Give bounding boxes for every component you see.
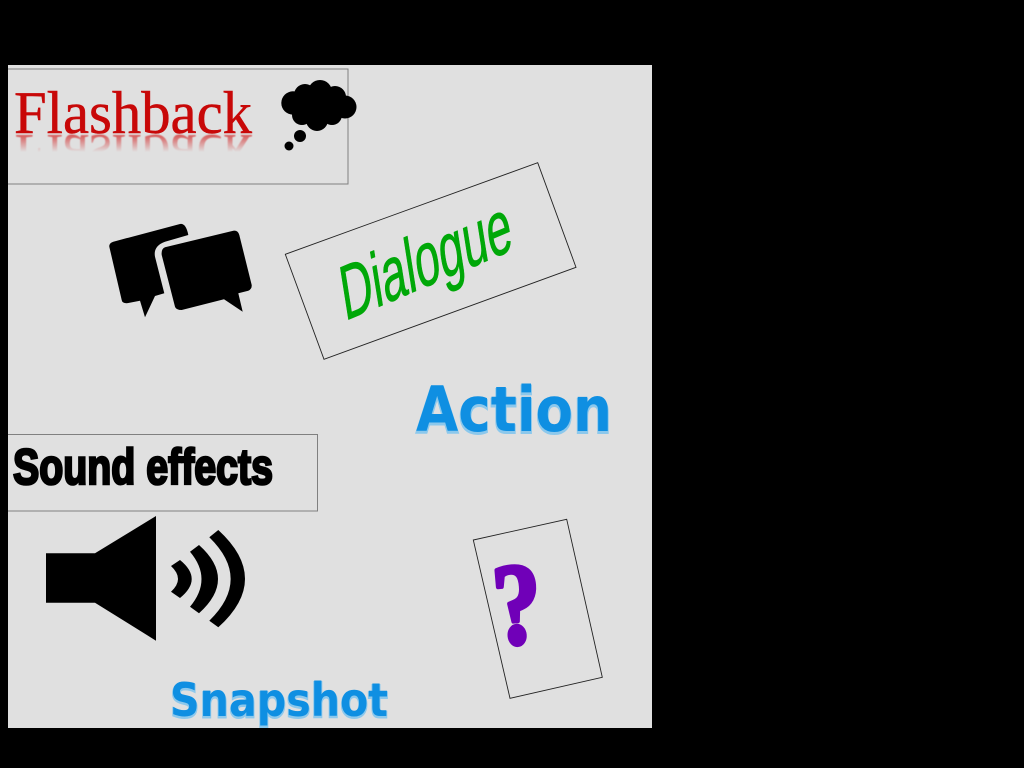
flashback heading: Flashback xyxy=(14,80,252,146)
snapshot heading: Snapshot xyxy=(170,674,388,728)
background panel xyxy=(8,65,652,728)
action heading: Action xyxy=(416,375,612,448)
icon: speaker xyxy=(46,516,245,641)
flashback box xyxy=(8,69,348,184)
sound effects heading: Sound effects xyxy=(13,439,273,495)
question mark: ? xyxy=(488,539,547,671)
panel: dialogue xyxy=(285,163,576,359)
question box xyxy=(473,519,602,698)
panel: flashback xyxy=(8,69,356,188)
dialogue heading: Dialogue xyxy=(334,181,517,337)
sound effects box xyxy=(8,434,318,511)
flashback reflection: Flashback xyxy=(14,122,252,188)
panel: sound effects xyxy=(8,434,318,641)
dialogue box xyxy=(285,163,576,359)
action heading: Action xyxy=(416,373,612,446)
snapshot heading: Snapshot xyxy=(170,673,388,727)
icon: thought cloud xyxy=(281,80,356,150)
panel: question xyxy=(473,519,602,698)
icon: speech bubbles xyxy=(109,224,252,317)
